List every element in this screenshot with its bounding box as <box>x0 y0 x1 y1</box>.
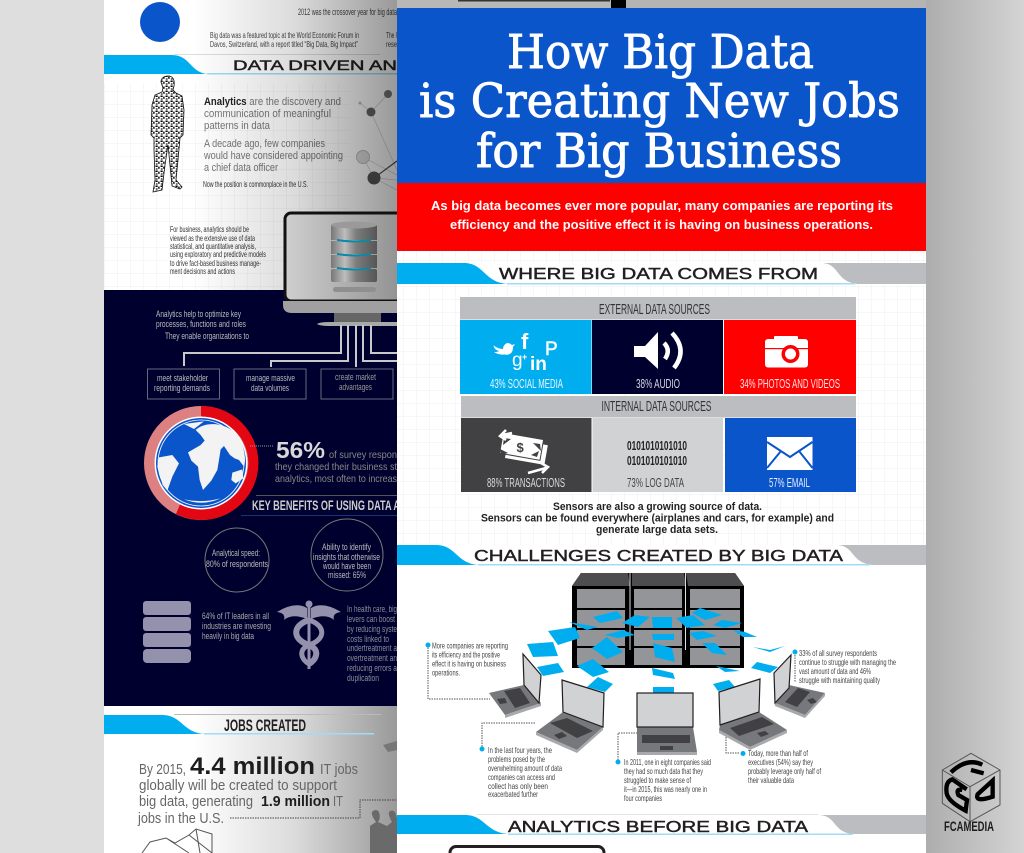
cell: email: 57% EMAIL <box>769 475 810 490</box>
business analytics paragraph: using exploratory and predictive models <box>170 249 266 259</box>
section banner: jobs created <box>104 714 381 735</box>
header: internal data sources <box>461 396 856 418</box>
callout: reporting efficiency: its efficiency and the positive <box>432 650 500 660</box>
backdrop shadow right <box>926 0 1024 853</box>
data leaders text: heavily in big data <box>202 631 254 641</box>
header: internal data sources: INTERNAL DATA SOURCES <box>602 398 712 415</box>
56 percent callout: they changed their business st <box>275 461 397 473</box>
header: external data sources <box>460 297 856 320</box>
health care text: by reducing syste <box>347 624 397 634</box>
role box labels: data volumes <box>251 383 289 394</box>
icon: social media logos: + <box>522 352 527 362</box>
health care text: costs linked to <box>347 634 389 644</box>
56 percent callout <box>250 437 397 485</box>
cell: log data <box>592 418 723 492</box>
section banner: challenges <box>397 545 926 566</box>
cell: email <box>725 418 856 492</box>
callout: last four years: In the last four years, the <box>488 745 552 755</box>
section banner: data driven analytics <box>104 54 397 74</box>
chart: 56 percent donut with globe <box>150 406 258 520</box>
cell: audio: 38% AUDIO <box>636 376 680 391</box>
56 percent callout: of survey respon <box>329 449 397 461</box>
sensors text: Sensors can be found everywhere (airplanes and cars, for example) and <box>481 512 834 524</box>
health care text: overtreatment an <box>347 653 397 663</box>
analytics text block: A decade ago, few companies <box>204 138 325 150</box>
panel: main infographic page <box>397 8 926 853</box>
top strip dark pieces <box>397 0 926 9</box>
role boxes <box>148 369 393 399</box>
top text block <box>210 7 397 49</box>
analytics help text: They enable organizations to <box>165 331 249 342</box>
section banner: data driven analytics: DATA DRIVEN AN <box>233 57 397 73</box>
callout: one in eight <box>616 733 711 803</box>
business analytics paragraph: statistical, and quantitative analysis, <box>170 241 256 251</box>
icon: envelope <box>767 437 812 470</box>
benefit circle: insights <box>311 519 383 591</box>
top text block: Big data was a featured topic at the World Economic Forum in <box>210 30 359 40</box>
analytics text block: patterns in data <box>204 120 271 132</box>
data leaders text: industries are investing <box>202 621 271 631</box>
top text block: The I <box>386 30 397 40</box>
cell: photos and videos <box>724 320 856 394</box>
analytics text block: Now the position is commonplace in the U.S. <box>203 179 308 189</box>
subtitle block <box>397 183 926 251</box>
icon: polygon network <box>142 829 212 853</box>
icon: social media logos <box>493 329 558 375</box>
connector lines <box>184 325 397 367</box>
title: for Big Business <box>476 124 842 179</box>
callout: last four years: problems posed by the <box>488 754 545 764</box>
cell: audio <box>592 320 723 394</box>
callout: half of executives: Today, more than half of <box>748 748 808 758</box>
binary digits <box>627 438 687 468</box>
icon: business people silhouettes <box>370 810 397 853</box>
grid background <box>104 83 350 290</box>
callout: half of executives <box>726 737 821 785</box>
header: external data sources: EXTERNAL DATA SOURCES <box>599 301 710 318</box>
top text block: Davos, Switzerland, with a report titled “Big Data, Big Impact” <box>210 39 358 49</box>
analytics help text: processes, functions and roles <box>156 319 246 330</box>
analytics help text <box>156 309 249 342</box>
binary digits: 0101010101010 <box>627 438 687 453</box>
benefit circle: insights: Ability to identify <box>322 542 371 552</box>
role box labels: reporting demands <box>154 383 210 394</box>
icon: blue circle <box>140 2 180 42</box>
binary digits: 0101010101010 <box>627 453 687 468</box>
icon: speaker <box>634 332 681 369</box>
network graph <box>356 90 397 190</box>
health care text: levers can boost <box>347 614 395 624</box>
callout: one in eight: they had so much data that they <box>624 766 703 776</box>
monitor top edge <box>450 846 604 853</box>
56 percent callout: analytics, most often to increas <box>275 473 397 485</box>
callout: one in eight: it—in 2015, this was nearly one in <box>624 784 707 794</box>
benefit circle: insights: would have been <box>322 561 371 571</box>
jobs statistic text: 1.9 million <box>261 793 330 810</box>
cell: transactions: 88% TRANSACTIONS <box>487 475 565 490</box>
callout: half of executives: their valuable data <box>748 775 794 785</box>
jobs statistic text: 4.4 million <box>190 753 315 780</box>
icon: social media logos: g <box>512 350 523 371</box>
callout: reporting efficiency: More companies are reporting <box>432 640 508 650</box>
callout: survey respondents: vast amount of data and 46% <box>799 666 871 676</box>
role box labels <box>154 372 376 394</box>
callout: reporting efficiency: operations. <box>432 668 460 678</box>
callout: survey respondents <box>792 648 896 685</box>
role box labels: advantages <box>339 382 372 393</box>
logo: FCAMEDIA <box>942 753 1000 834</box>
cell: log data: 73% LOG DATA <box>627 475 684 490</box>
jobs statistic text: jobs in the U.S. <box>137 810 224 827</box>
sensors text: generate large data sets. <box>596 524 718 536</box>
callout: survey respondents: struggle with maintaining quality <box>799 675 881 685</box>
callout: last four years: exacerbated further <box>488 789 538 799</box>
cell: photos and videos: 34% PHOTOS AND VIDEOS <box>740 376 840 391</box>
laptop 2 <box>536 680 604 753</box>
illustration: servers and laptops <box>489 573 825 755</box>
benefit circle: insights: missed: 65% <box>328 570 366 580</box>
callout: half of executives: executives (54%) say they <box>748 757 813 767</box>
analytics text block: communication of meaningful <box>204 108 331 120</box>
benefit circle: analytical speed: 80% of respondents <box>206 559 268 570</box>
health care text: duplication <box>347 673 379 683</box>
icon: camera <box>765 336 808 368</box>
analytics text block: Analytics are the discovery and <box>204 96 341 108</box>
title: is Creating New Jobs <box>419 74 900 129</box>
title: How Big Data <box>507 25 814 80</box>
grid background <box>397 251 926 545</box>
role box labels: create market <box>335 372 376 383</box>
jobs statistic text: big data, generating <box>139 793 253 810</box>
business analytics paragraph <box>170 224 266 276</box>
callout: survey respondents: 33% of all survey respondents <box>799 648 877 658</box>
shading on background page <box>104 0 397 853</box>
benefit circle: analytical speed <box>205 528 269 592</box>
business analytics paragraph: viewed as the extensive use of data <box>170 233 255 243</box>
cell: transactions <box>461 418 592 492</box>
business analytics paragraph: ment decisions and actions <box>170 266 235 276</box>
subtitle block: efficiency and the positive effect it is having on business operations. <box>450 217 873 232</box>
data leaders text: 64% of IT leaders in all <box>202 611 269 621</box>
sensors text: Sensors are also a growing source of data. <box>553 501 762 513</box>
logo: FCAMEDIA: FCAMEDIA <box>944 818 994 834</box>
title <box>419 25 900 179</box>
analytics help text: Analytics help to optimize key <box>156 309 241 320</box>
icon: money with arrows: $ <box>516 440 524 455</box>
jobs statistic text: IT jobs <box>320 761 358 778</box>
jobs statistic text: globally will be created to support <box>139 777 338 794</box>
top text block: rese <box>386 39 397 49</box>
icon: gray map fragment <box>383 741 397 752</box>
icon: social media logos: in <box>530 354 547 375</box>
data leaders text <box>202 611 271 641</box>
sensors text <box>481 501 834 536</box>
title block <box>397 8 926 183</box>
analytics text block: would have considered appointing <box>203 150 343 162</box>
callout: reporting efficiency: effect it is having on business <box>432 658 506 668</box>
56 percent callout: 56% <box>276 437 325 463</box>
section banner: analytics before big data <box>397 814 926 836</box>
callout: last four years: collect has only been <box>488 781 548 791</box>
laptop 3 <box>637 693 697 755</box>
laptop 1 <box>489 654 541 718</box>
analytics text block <box>203 96 343 189</box>
section banner: where big data comes from <box>397 263 926 284</box>
jobs statistic text: IT <box>333 793 343 810</box>
icon: database <box>143 601 191 663</box>
section banner: jobs created: JOBS CREATED <box>224 716 306 735</box>
jobs statistic text <box>137 753 358 827</box>
heading: key benefits: KEY BENEFITS OF USING DATA A <box>252 497 400 513</box>
icon: monitor with database <box>283 213 415 326</box>
callout: one in eight: four companies <box>624 793 662 803</box>
subtitle block: As big data becomes ever more popular, many companies are reporting its <box>431 198 893 213</box>
jobs statistic text: By 2015, <box>139 761 186 778</box>
section banner: analytics before big data: ANALYTICS BEFORE BIG DATA <box>508 819 809 836</box>
icon: social media logos: P <box>545 339 558 360</box>
section banner: where big data comes from: WHERE BIG DATA COMES FROM <box>499 266 818 283</box>
panel: background infographic page <box>104 0 415 853</box>
analytics text block: a chief data officer <box>204 162 278 174</box>
role box labels: meet stakeholder <box>157 373 208 384</box>
server racks <box>572 573 744 668</box>
callout: reporting efficiency <box>426 640 508 699</box>
role box labels: manage massive <box>246 373 295 384</box>
icon: person made of data <box>151 76 184 192</box>
benefit circle: analytical speed: Analytical speed: <box>212 548 260 559</box>
panel: dark navy section <box>104 290 397 706</box>
dotted connector <box>230 800 397 818</box>
laptop 5 <box>774 655 825 718</box>
health care text: In health care, big <box>347 604 397 614</box>
callout: survey respondents: continue to struggle with managing the <box>799 657 896 667</box>
health care text: reducing errors a <box>347 663 397 673</box>
section banner: challenges: CHALLENGES CREATED BY BIG DATA <box>474 548 844 565</box>
cell: social media: 43% SOCIAL MEDIA <box>490 376 563 391</box>
laptop 4 <box>719 679 787 750</box>
icon: cube <box>942 753 1000 822</box>
icon: caduceus <box>277 600 341 669</box>
callout: last four years <box>480 723 562 799</box>
callout: one in eight: struggled to make sense of <box>624 775 691 785</box>
callout: last four years: companies can access and <box>488 772 555 782</box>
data sources table <box>460 297 856 492</box>
flying data sheets <box>527 608 785 693</box>
cell: social media <box>460 320 592 394</box>
business analytics paragraph: For business, analytics should be <box>170 224 249 234</box>
callout: last four years: overwhelming amount of data <box>488 763 562 773</box>
top text block: 2012 was the crossover year for big data <box>298 7 397 17</box>
callout: one in eight: In 2011, one in eight companies said <box>624 757 711 767</box>
benefit circle: insights: insights that otherwise <box>313 552 380 562</box>
business analytics paragraph: to drive fact-based business manage- <box>170 258 261 268</box>
health care text <box>347 604 397 683</box>
icon: social media logos: f <box>521 329 529 354</box>
callout: half of executives: probably leverage only half of <box>748 766 821 776</box>
health care text: undertreatment a <box>347 643 397 653</box>
